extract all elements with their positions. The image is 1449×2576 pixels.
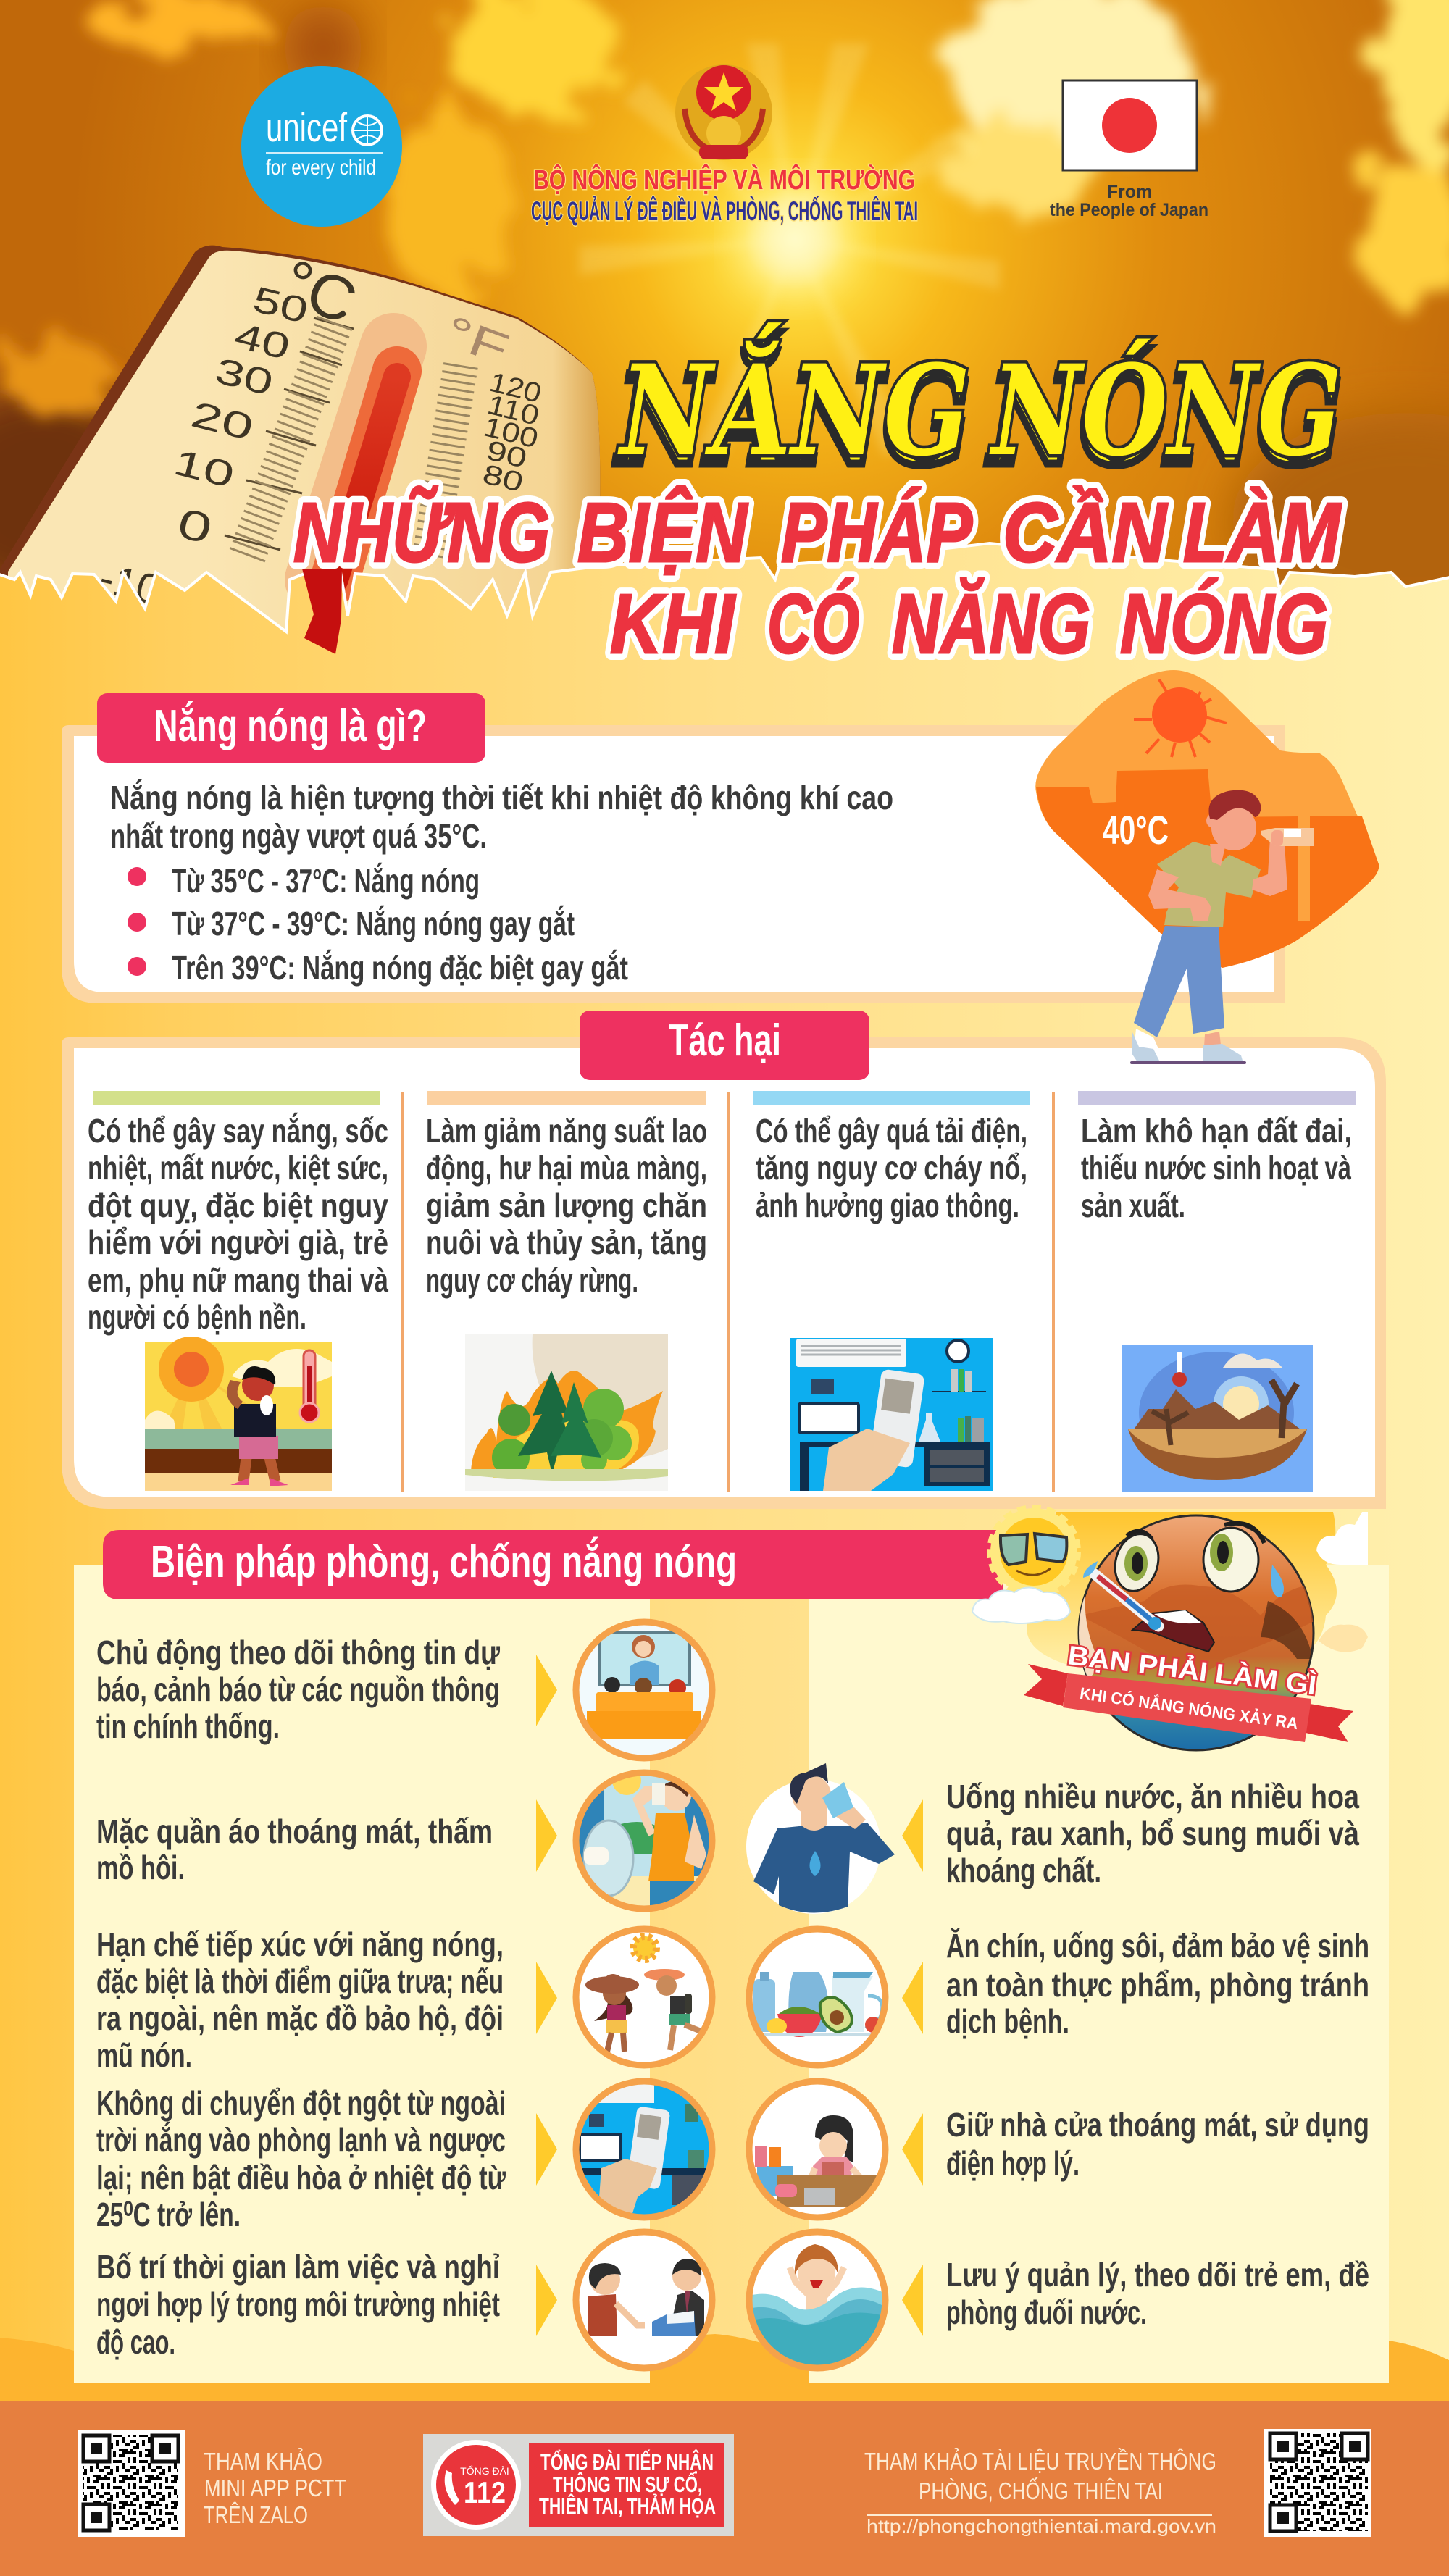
hotline 112 box: TỔNG ĐÀI TIẾP NHẬN xyxy=(540,2449,714,2475)
footer text: mini app: TRÊN ZALO xyxy=(204,2501,308,2528)
subtitle: những biện pháp cần làm: CÓ xyxy=(767,577,859,671)
footer text: communication materials: http://phongchongthientai.mard.gov.vn xyxy=(867,2517,1216,2537)
thermometer: 80 xyxy=(480,459,526,498)
ministry name: BỘ NÔNG NGHIỆP VÀ MÔI TRƯỜNG xyxy=(533,163,915,196)
measure 7 text xyxy=(946,1927,1369,2040)
column 3 text: ảnh hưởng giao thông. xyxy=(756,1187,1019,1224)
icon: child in water xyxy=(746,2232,891,2383)
logo: unicef: unicef xyxy=(266,104,347,150)
heading pill xyxy=(580,1011,869,1080)
logo: Japan flag: From xyxy=(1107,182,1152,202)
subtitle: những biện pháp cần làm: CẦN xyxy=(1003,485,1168,580)
measure 9 text xyxy=(946,2256,1369,2331)
column 2 text: giảm sản lượng chăn xyxy=(426,1187,707,1224)
column 1 text: Có thể gây say nắng, sốc xyxy=(88,1112,388,1150)
subtitle: những biện pháp cần làm: NÓNG xyxy=(1120,577,1328,671)
heading pill xyxy=(97,693,485,763)
thermometer: °C xyxy=(272,246,366,338)
measure 2 text: Mặc quần áo thoáng mát, thấm xyxy=(96,1812,493,1850)
sun with sunglasses xyxy=(990,1508,1077,1595)
footer text: communication materials: THAM KHẢO TÀI LIỆU TRUYỀN THÔNG xyxy=(864,2448,1216,2475)
heading: prevention xyxy=(103,1530,1003,1599)
panel: what is heat wave xyxy=(62,693,1285,1003)
subtitle: những biện pháp cần làm: CẦN xyxy=(1003,485,1168,580)
column 1 text: nhiệt, mất nước, kiệt sức, xyxy=(88,1149,388,1187)
subtitle: những biện pháp cần làm: BIỆN xyxy=(577,485,748,580)
icon: man drinking water xyxy=(746,1763,895,1914)
subtitle: những biện pháp cần làm: KHI xyxy=(610,577,736,671)
ribbon xyxy=(1024,1640,1353,1742)
thermometer: 110 xyxy=(484,390,542,432)
column 3 text: Có thể gây quá tải điện, xyxy=(756,1112,1027,1150)
icon: watching news xyxy=(576,1622,712,1758)
column 3 text xyxy=(756,1112,1027,1224)
thermometer: 10 xyxy=(170,442,238,495)
ministry name: CỤC QUẢN LÝ ĐÊ ĐIỀU VÀ PHÒNG, CHỐNG THIÊN TAI xyxy=(531,196,918,226)
cloud right xyxy=(1316,1512,1368,1565)
icon: air conditioner and remote xyxy=(790,1338,993,1491)
subtitle: những biện pháp cần làm xyxy=(293,485,1342,671)
footer text: mini app: THAM KHẢO xyxy=(204,2448,322,2475)
footer text: communication materials: PHÒNG, CHỐNG THIÊN TAI xyxy=(919,2477,1163,2504)
orange wave at bottom of page xyxy=(0,2334,1449,2412)
hotline 112 box: TỔNG ĐÀI xyxy=(460,2464,509,2477)
measure 4 text: trời nắng vào phòng lạnh và ngược xyxy=(96,2121,506,2159)
column 1 text xyxy=(88,1112,388,1336)
subtitle: những biện pháp cần làm: CÓ xyxy=(767,577,859,671)
column 4 text: Làm khô hạn đất đai, xyxy=(1081,1112,1352,1150)
measure 1 text: tin chính thống. xyxy=(96,1707,280,1745)
title: NẮNG NÓNG: NẮNG xyxy=(614,331,970,493)
subtitle: những biện pháp cần làm: LÀM xyxy=(1183,485,1342,580)
measure 4 text: Không di chuyển đột ngột từ ngoài xyxy=(96,2084,506,2122)
measure 1 text xyxy=(96,1634,501,1745)
subtitle: những biện pháp cần làm: BIỆN xyxy=(577,485,748,580)
measure 2 text xyxy=(96,1812,493,1886)
column 2 text xyxy=(426,1112,707,1299)
measure 5 text xyxy=(96,2248,500,2361)
footer band xyxy=(0,2401,1449,2576)
measure 7 text: an toàn thực phẩm, phòng tránh xyxy=(946,1966,1369,2004)
icon: AC remote xyxy=(572,2078,717,2220)
hotline 112 box: THÔNG TIN SỰ CỐ, xyxy=(553,2471,702,2497)
subtitle: những biện pháp cần làm: NĂNG xyxy=(892,577,1090,671)
definition text: Nắng nóng là hiện tượng thời tiết khi nhiệt độ không khí cao xyxy=(110,779,893,816)
measure 3 text: mũ nón. xyxy=(96,2036,192,2074)
logo: unicef xyxy=(241,66,402,227)
QR code: Zalo mini app xyxy=(78,2430,185,2537)
measure 6 text xyxy=(946,1778,1359,1889)
definition text xyxy=(110,779,893,855)
measure 4 text xyxy=(96,2084,506,2233)
thermometer: 120 xyxy=(486,367,544,409)
column 2 text: động, hư hại mùa màng, xyxy=(426,1149,707,1187)
subtitle: những biện pháp cần làm: LÀM xyxy=(1183,485,1342,580)
icon: work and rest xyxy=(576,2232,712,2368)
bullet list: Trên 39°C: Nắng nóng đặc biệt gay gắt xyxy=(172,949,628,987)
column 3 text: tăng nguy cơ cháy nổ, xyxy=(756,1149,1027,1187)
earth xyxy=(1076,1515,1326,1750)
illustration: sick globe with banner xyxy=(972,1508,1368,1750)
title: NẮNG NÓNG: NÓNG xyxy=(986,346,1342,493)
measure 6 text: Uống nhiều nước, ăn nhiều hoa xyxy=(946,1778,1359,1815)
bullet list: Từ 35°C - 37°C: Nắng nóng xyxy=(172,862,480,900)
icon: man in airy clothes with fan xyxy=(572,1766,717,1920)
subtitle: những biện pháp cần làm: KHI xyxy=(610,577,736,671)
ministry name xyxy=(531,163,918,226)
column 4 text: thiếu nước sinh hoạt và xyxy=(1081,1149,1351,1187)
city silhouette xyxy=(1036,769,1379,968)
thermometer: 0 xyxy=(173,499,217,553)
title: NẮNG NÓNG: NÓNG xyxy=(989,337,1342,484)
icon: forest fire xyxy=(465,1334,668,1491)
hotline 112 box xyxy=(423,2434,734,2536)
QR code: documents xyxy=(1264,2429,1371,2537)
footer text: communication materials xyxy=(864,2448,1216,2537)
footer text: mini app xyxy=(204,2448,346,2528)
icon: person with heatstroke xyxy=(145,1337,332,1491)
measure 3 text: ra ngoài, nên mặc đồ bảo hộ, đội xyxy=(96,1999,504,2037)
measure 5 text: Bố trí thời gian làm việc và nghỉ xyxy=(96,2248,500,2286)
column 2 text: nguy cơ cháy rừng. xyxy=(426,1261,638,1299)
heading: prevention: Biện pháp phòng, chống nắng nóng xyxy=(151,1537,737,1587)
ribbon: BẠN PHẢI LÀM GÌ xyxy=(1066,1640,1318,1700)
subtitle: những biện pháp cần làm: NHỮNG xyxy=(293,485,550,580)
column 1 text: đột quỵ, đặc biệt nguy xyxy=(88,1187,388,1224)
thermometer: 40 xyxy=(230,315,294,367)
measure 1 text: báo, cảnh báo từ các nguồn thông xyxy=(96,1670,500,1708)
measure 2 text: mồ hôi. xyxy=(96,1849,185,1886)
heading pill: Nắng nóng là gì? xyxy=(154,701,427,751)
panel: prevention measures backgrounds xyxy=(74,1565,1389,2383)
thermometer: -10 xyxy=(95,554,165,614)
measure 6 text: khoáng chất. xyxy=(946,1852,1101,1889)
column 4 text xyxy=(1081,1112,1352,1224)
panel: harms xyxy=(62,1011,1386,1509)
title: NẮNG NÓNG: NẮNG xyxy=(617,322,970,484)
subtitle: những biện pháp cần làm: NÓNG xyxy=(1120,577,1328,671)
thermometer: 30 xyxy=(211,350,277,403)
measure 9 text: phòng đuối nước. xyxy=(946,2293,1147,2331)
measure 4 text: 25⁰C trở lên. xyxy=(96,2196,241,2233)
cloud left xyxy=(972,1588,1070,1623)
header photo: blazing sun sky xyxy=(0,0,1449,637)
hotline 112 box: THIÊN TAI, THẢM HỌA xyxy=(539,2493,716,2519)
icon: woman at home xyxy=(749,2081,885,2217)
logo: Japan flag xyxy=(1050,80,1208,220)
thermometer: 20 xyxy=(187,393,257,448)
measure 7 text: dịch bệnh. xyxy=(946,2002,1069,2040)
measure 3 text: Hạn chế tiếp xúc với năng nóng, xyxy=(96,1925,504,1963)
thermometer: °F xyxy=(438,306,515,374)
jagged paper edge of header xyxy=(0,543,1449,695)
man drinking xyxy=(1130,790,1314,1064)
measure 5 text: ngơi hợp lý trong môi trường nhiệt xyxy=(96,2286,500,2323)
subtitle: những biện pháp cần làm: NĂNG xyxy=(892,577,1090,671)
column 1 text: người có bệnh nền. xyxy=(88,1298,306,1336)
ribbon: KHI CÓ NẮNG NÓNG XẢY RA xyxy=(1079,1682,1300,1733)
subtitle: những biện pháp cần làm: NHỮNG xyxy=(293,485,550,580)
arrows pointing to illustrations xyxy=(536,1655,923,2336)
thermometer: 100 xyxy=(480,411,541,454)
measure 6 text: quả, rau xanh, bổ sung muối và xyxy=(946,1815,1359,1852)
orange blob xyxy=(1035,670,1379,968)
icon: drought earth xyxy=(1122,1345,1313,1492)
column 4 text: sản xuất. xyxy=(1081,1187,1185,1224)
icon: two people in the sun xyxy=(576,1929,712,2065)
heading pill: Tác hại xyxy=(669,1016,781,1066)
measure 8 text xyxy=(946,2106,1369,2182)
thermometer red tip over edge xyxy=(302,569,342,654)
logo: Japan flag: the People of Japan xyxy=(1050,200,1208,220)
illustration: orange blob with hot man xyxy=(1035,670,1379,1064)
small sun xyxy=(1134,679,1227,757)
peach cloud xyxy=(1319,1625,1368,1652)
measure 5 text: độ cao. xyxy=(96,2323,175,2361)
thermometer: 90 xyxy=(483,435,530,474)
icon: safe food xyxy=(749,1929,885,2065)
measure 3 text xyxy=(96,1925,504,2074)
40°C label: 40°C xyxy=(1103,807,1169,853)
measure 4 text: lại; nên bật điều hòa ở nhiệt độ từ xyxy=(96,2159,506,2196)
thermometer: 50 xyxy=(249,279,312,331)
logo: unicef: for every child xyxy=(266,156,376,180)
measure 1 text: Chủ động theo dõi thông tin dự xyxy=(96,1634,501,1671)
definition text: nhất trong ngày vượt quá 35°C. xyxy=(110,817,487,855)
title: NẮNG NÓNG xyxy=(614,322,1342,493)
column 2 text: Làm giảm năng suất lao xyxy=(426,1112,707,1150)
column colour bars xyxy=(93,1091,1356,1105)
bullet list: Từ 37°C - 39°C: Nắng nóng gay gắt xyxy=(172,905,575,942)
measure 8 text: điện hợp lý. xyxy=(946,2144,1080,2182)
subtitle: những biện pháp cần làm: PHÁP xyxy=(781,485,973,580)
bullet list xyxy=(128,862,628,987)
column 2 text: nuôi và thủy sản, tăng xyxy=(426,1224,707,1261)
subtitle: những biện pháp cần làm: PHÁP xyxy=(781,485,973,580)
column 1 text: em, phụ nữ mang thai và xyxy=(88,1261,388,1299)
thermometer xyxy=(0,246,600,637)
logo: Vietnam national emblem xyxy=(675,64,772,160)
footer text: mini app: MINI APP PCTT xyxy=(204,2475,346,2501)
hotline 112 box: 112 xyxy=(464,2475,506,2509)
column 1 text: hiểm với người già, trẻ xyxy=(88,1224,388,1261)
yellow glow xyxy=(1027,1512,1337,1666)
measure 3 text: đặc biệt là thời điểm giữa trưa; nếu xyxy=(96,1962,504,2000)
